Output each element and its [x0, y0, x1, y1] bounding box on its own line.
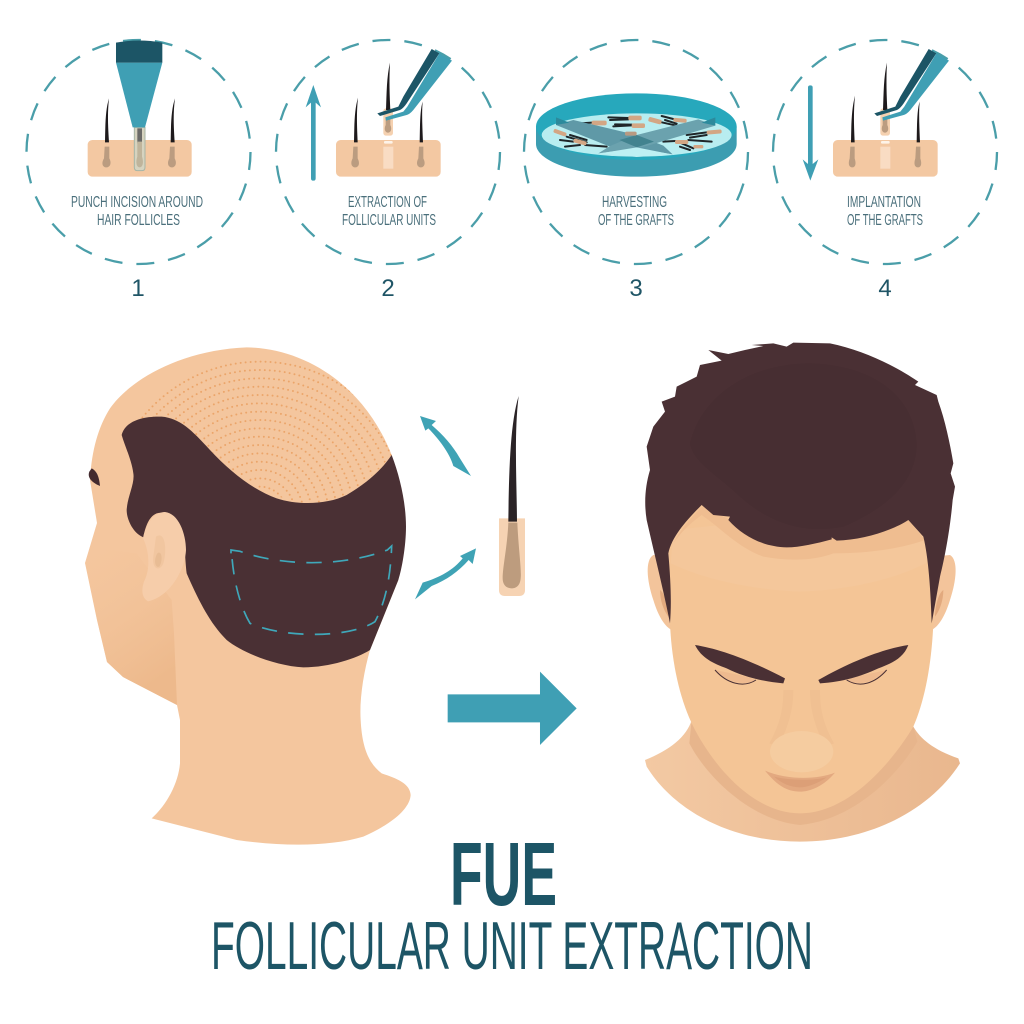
crossing strips — [556, 120, 673, 154]
illustration: punch over skin — [88, 40, 192, 177]
dashed circle 4 — [773, 40, 997, 264]
eyes — [715, 670, 756, 683]
number 3: 3 — [629, 275, 643, 302]
ear — [142, 512, 186, 601]
caption 3: OF THE GRAFTS — [598, 212, 674, 229]
number 4: 4 — [878, 275, 892, 302]
panel: step 1 punch incision — [26, 40, 250, 302]
illustration: petri dish with grafts — [536, 93, 737, 177]
illustration: front of head with restored hair — [645, 343, 960, 842]
caption 4: IMPLANTATION — [847, 194, 921, 211]
caption 3: HARVESTING — [602, 194, 667, 211]
mouth — [765, 771, 835, 792]
eyebrow — [89, 468, 100, 486]
arrow down — [803, 85, 818, 181]
eyebrows — [695, 645, 785, 683]
panel: step 2 extraction — [276, 40, 500, 302]
dashed circle 1 — [26, 40, 250, 264]
hair shadow on forehead — [673, 506, 925, 560]
ears — [648, 555, 672, 630]
follicle graft — [499, 396, 525, 596]
caption 2: FOLLICULAR UNITS — [342, 212, 436, 229]
illustration: back of head with donor area — [85, 347, 412, 845]
illustration: tweezers extracting follicle — [306, 49, 452, 181]
neck — [645, 720, 960, 842]
caption 4: OF THE GRAFTS — [847, 212, 923, 229]
panel: step 4 implantation — [773, 40, 997, 302]
number 2: 2 — [381, 275, 395, 302]
big arrow — [448, 672, 577, 745]
panel: step 3 harvesting — [524, 40, 748, 302]
caption 1: HAIR FOLLICLES — [97, 212, 180, 229]
arrow: curved top — [420, 416, 471, 476]
illustration: tweezers implanting follicle — [833, 49, 949, 177]
nose — [769, 690, 793, 747]
title FUE: FUE — [450, 825, 557, 925]
face — [667, 463, 935, 813]
hair — [645, 343, 955, 623]
number 1: 1 — [131, 275, 145, 302]
arrow: curved bottom — [415, 548, 476, 599]
caption 2: EXTRACTION OF — [348, 194, 427, 211]
dashed circle 2 — [276, 40, 500, 264]
graft dots on scalp — [142, 360, 392, 502]
donor area dashes — [231, 546, 392, 634]
dashed circle 3 — [524, 40, 748, 264]
caption 1: PUNCH INCISION AROUND — [71, 194, 203, 211]
